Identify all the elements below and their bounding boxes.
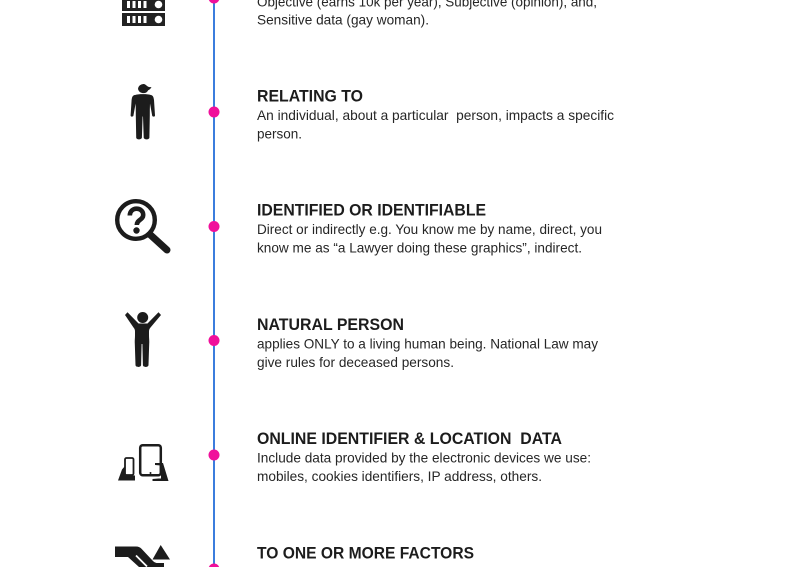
text block: natural person: applies ONLY to a living human being. National Law may [257, 336, 598, 352]
text block: online identifier and location data: Include data provided by the electronic devices we use: [257, 450, 591, 466]
text block: relating to: RELATING TO [257, 86, 363, 106]
text block: relating to: person. [257, 126, 302, 142]
text block: online identifier and location data: mobiles, cookies identifiers, IP address, others. [257, 468, 542, 484]
icon: hand with triangle [115, 545, 170, 567]
timeline [208, 0, 220, 567]
text block: natural person [257, 315, 598, 370]
text block: online identifier and location data [257, 429, 591, 484]
icon: magnifier with question mark [117, 201, 167, 250]
text block: data types: Sensitive data (gay woman). [257, 12, 429, 28]
text block: to one or more factors: TO ONE OR MORE FACTORS [257, 544, 474, 562]
text block: relating to: An individual, about a particular person, impacts a specific [257, 107, 614, 123]
text block: identified or identifiable: Direct or indirectly e.g. You know me by name, direct, you [257, 221, 602, 237]
icon: person [131, 84, 155, 139]
text block: natural person: NATURAL PERSON [257, 315, 404, 334]
text block: data types [257, 0, 597, 28]
text block: identified or identifiable: know me as “a Lawyer doing these graphics”, indirect. [257, 240, 582, 256]
text block: natural person: give rules for deceased persons. [257, 354, 454, 370]
text block: online identifier and location data: ONLINE IDENTIFIER & LOCATION DATA [257, 429, 562, 448]
text block: relating to [257, 86, 614, 142]
text block: identified or identifiable: IDENTIFIED OR IDENTIFIABLE [257, 200, 486, 220]
icon: person with raised arms [125, 312, 161, 367]
icon: phone and tablet in hands [118, 445, 168, 481]
icon: server [122, 0, 165, 26]
text block: identified or identifiable [257, 200, 602, 256]
